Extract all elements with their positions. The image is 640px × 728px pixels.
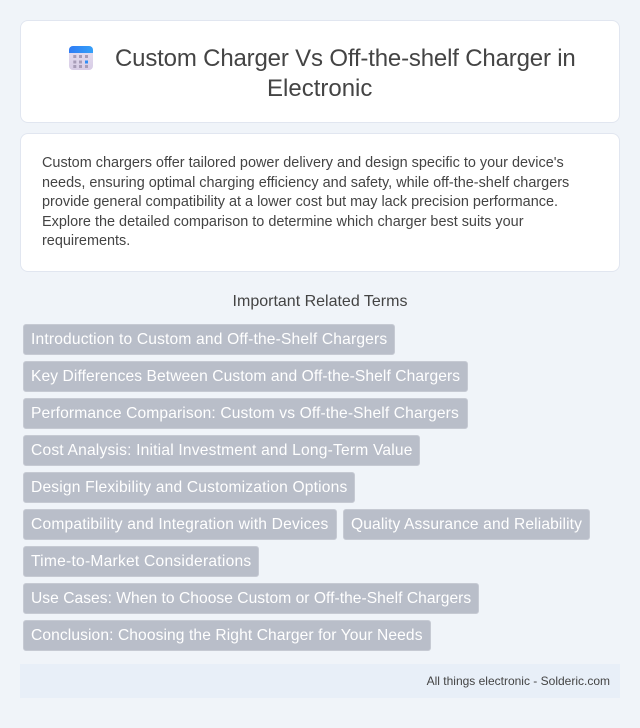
icon: calendar [69, 46, 93, 70]
tag [23, 509, 337, 540]
tag: Compatibility and Integration with Devices [31, 516, 328, 533]
tag [23, 472, 355, 503]
tag [23, 361, 468, 392]
tag list [23, 324, 590, 651]
intro text panel [20, 133, 620, 272]
intro paragraph [42, 155, 569, 249]
tag: Key Differences Between Custom and Off-the-Shelf Chargers [31, 368, 460, 385]
tag [23, 583, 479, 614]
section heading: Important Related Terms [233, 293, 407, 310]
tag [23, 398, 468, 429]
tag: Use Cases: When to Choose Custom or Off-the-Shelf Chargers [31, 590, 471, 607]
tag: Cost Analysis: Initial Investment and Long-Term Value [31, 442, 413, 459]
tag [343, 509, 590, 540]
intro paragraph: Custom chargers offer tailored power delivery and design specific to your device's [42, 155, 564, 171]
tag: Introduction to Custom and Off-the-Shelf Chargers [31, 331, 387, 348]
intro paragraph: needs, ensuring optimal charging efficiency and safety, while off-the-shelf chargers [42, 174, 569, 190]
tag: Design Flexibility and Customization Options [31, 479, 347, 496]
tag [23, 324, 395, 355]
tag: Conclusion: Choosing the Right Charger for Your Needs [31, 627, 423, 644]
intro paragraph: Explore the detailed comparison to determine which charger best suits your [42, 214, 524, 230]
tag [23, 546, 259, 577]
tag: Time-to-Market Considerations [31, 553, 251, 570]
header panel [20, 20, 620, 123]
intro paragraph: requirements. [42, 233, 130, 249]
title [115, 45, 576, 102]
intro paragraph: provide general compatibility at a lower cost but may lack precision performance. [42, 194, 558, 210]
footer text: All things electronic - Solderic.com [427, 674, 610, 688]
tag: Quality Assurance and Reliability [351, 516, 582, 533]
tag [23, 435, 420, 466]
tag: Performance Comparison: Custom vs Off-the-Shelf Chargers [31, 405, 459, 422]
tag [23, 620, 431, 651]
footer [20, 664, 620, 698]
title: Electronic [267, 75, 372, 102]
title: Custom Charger Vs Off-the-shelf Charger in [115, 45, 576, 72]
